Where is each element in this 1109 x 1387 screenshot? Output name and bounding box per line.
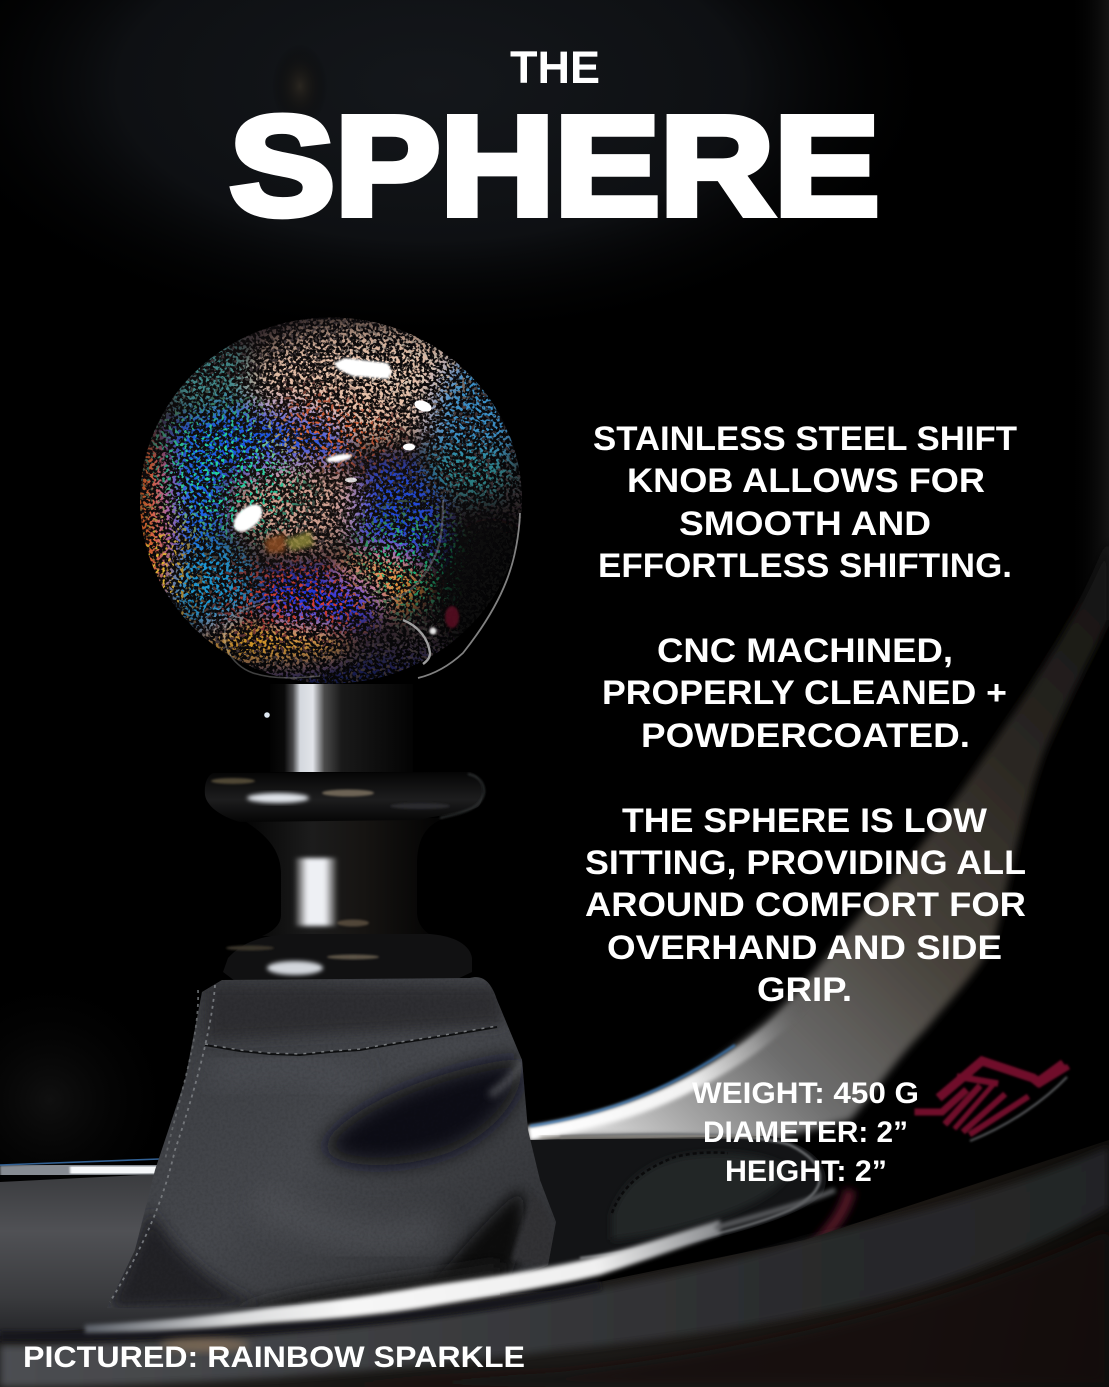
black ring bbox=[205, 772, 483, 822]
belly highlight bbox=[260, 1200, 440, 1237]
text block: specifications: HEIGHT: 2” bbox=[725, 1155, 887, 1188]
console surround bbox=[0, 540, 1109, 1387]
dark fold bbox=[322, 1058, 521, 1165]
right lobe bbox=[512, 1212, 530, 1262]
paragraph: material: EFFORTLESS SHIFTING. bbox=[598, 547, 1012, 585]
silver arc band bbox=[530, 540, 1109, 1140]
paragraph: comfort: OVERHAND AND SIDE bbox=[607, 929, 1002, 967]
red reflection bbox=[445, 606, 459, 628]
warm glow bbox=[160, 1338, 250, 1352]
paragraph: machining: POWDERCOATED. bbox=[641, 717, 970, 755]
reflected rim lines bbox=[224, 500, 520, 678]
horizontal stitch seam bbox=[205, 1027, 497, 1055]
white arc edge bbox=[528, 990, 815, 1134]
title bbox=[230, 42, 879, 244]
specular highlights bbox=[229, 358, 433, 537]
text block: specifications: WEIGHT: 450 G bbox=[692, 1077, 919, 1110]
lower neck bbox=[240, 818, 445, 936]
leather grain bbox=[304, 1123, 305, 1124]
paragraph: comfort bbox=[585, 802, 1026, 1009]
paragraph: comfort: AROUND COMFORT FOR bbox=[585, 886, 1026, 924]
text block: description bbox=[585, 420, 1026, 1009]
upper neck bbox=[270, 684, 413, 772]
heading: the: THE bbox=[510, 42, 600, 93]
shoulder highlight bbox=[226, 1060, 288, 1078]
leather boot bbox=[110, 977, 556, 1308]
red blur reflection bbox=[812, 1190, 850, 1250]
paragraph: material: KNOB ALLOWS FOR bbox=[627, 462, 985, 500]
holographic sparkle bbox=[140, 318, 522, 684]
leather fold right bbox=[612, 1153, 790, 1240]
side stitches bbox=[110, 985, 215, 1302]
text block: specifications bbox=[692, 1077, 919, 1188]
lower floor bbox=[0, 1140, 1109, 1387]
caption: pictured finish: PICTURED: RAINBOW SPARKLE bbox=[23, 1341, 525, 1374]
upper collar shading bbox=[205, 985, 505, 1040]
heading: sphere: SPHERE bbox=[230, 86, 879, 244]
paragraph: machining bbox=[602, 632, 1007, 755]
paragraph: machining: PROPERLY CLEANED + bbox=[602, 674, 1007, 712]
right gap shadow bbox=[436, 1188, 528, 1276]
plate metal glint bbox=[560, 1134, 820, 1258]
paragraph: machining: CNC MACHINED, bbox=[657, 632, 953, 670]
shifter plate right bbox=[520, 1136, 826, 1275]
fold stitching bbox=[612, 1152, 728, 1213]
icon: red rally logo badge bbox=[918, 1061, 1066, 1133]
bright lower rim band bbox=[85, 1190, 835, 1333]
highlight crease bbox=[490, 1058, 525, 1095]
text block: specifications: DIAMETER: 2” bbox=[703, 1116, 908, 1149]
paragraph: comfort: SITTING, PROVIDING ALL bbox=[585, 844, 1026, 882]
bottom shadow bbox=[238, 1264, 500, 1307]
paragraph: material: STAINLESS STEEL SHIFT bbox=[593, 420, 1017, 458]
paragraph: comfort: GRIP. bbox=[757, 971, 852, 1009]
broad grey band bbox=[0, 1147, 1109, 1387]
shift knob sphere bbox=[140, 318, 522, 684]
left shadow bbox=[107, 1210, 260, 1310]
left rim highlight bbox=[0, 1167, 160, 1173]
bottom edge dark bbox=[280, 1230, 1109, 1387]
paragraph: comfort: THE SPHERE IS LOW bbox=[622, 802, 988, 840]
flange bbox=[223, 934, 472, 981]
paragraph: material bbox=[593, 420, 1017, 585]
shift knob shaft bbox=[205, 684, 484, 981]
plate left bbox=[0, 1174, 500, 1338]
dark stripe bbox=[0, 1285, 600, 1336]
amber fleck bbox=[264, 531, 314, 553]
paragraph: material: SMOOTH AND bbox=[679, 505, 931, 543]
